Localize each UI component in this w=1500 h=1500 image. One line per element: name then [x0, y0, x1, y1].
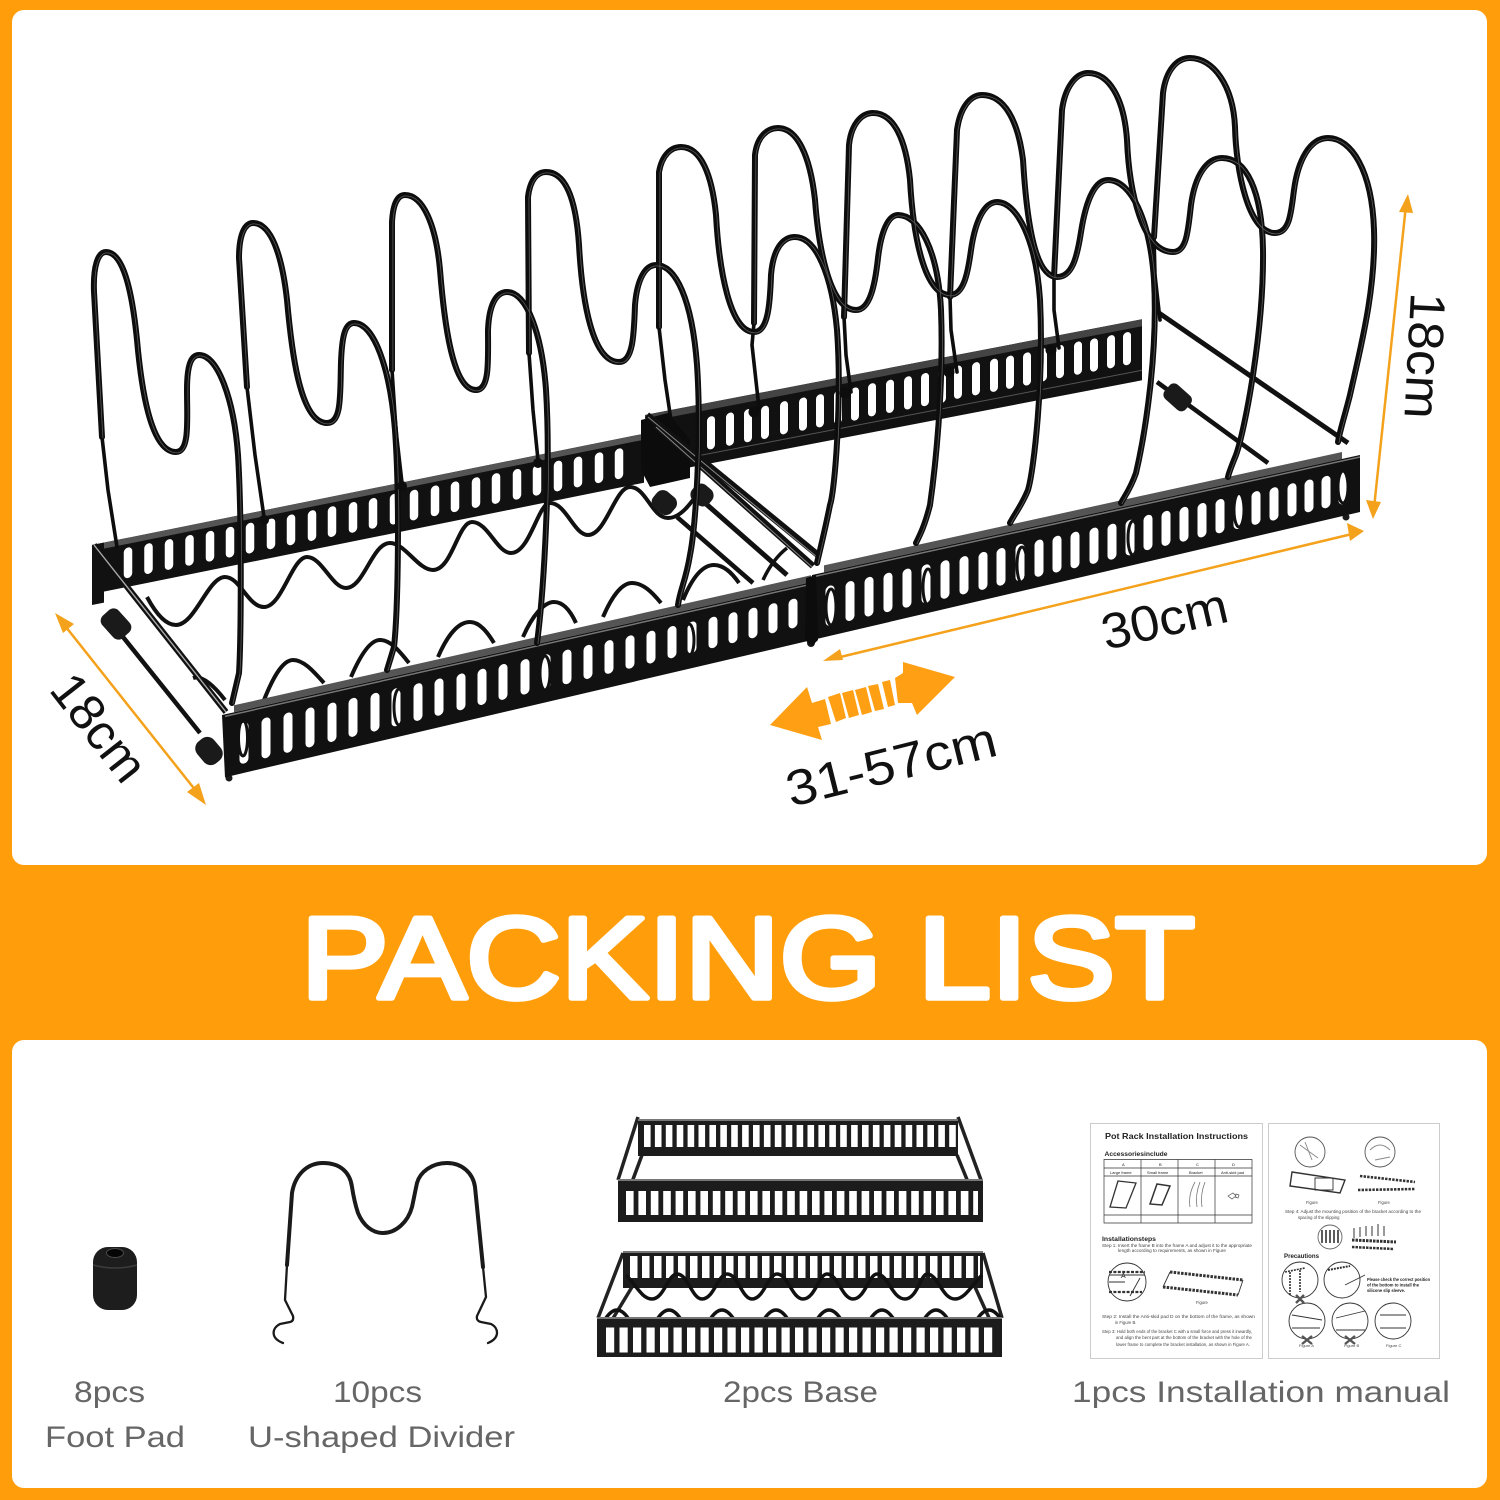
manual precaution note: silicone slip sleeve. — [1367, 1288, 1405, 1293]
manual accessories table: Small frame — [1147, 1170, 1169, 1175]
manual figures top — [1290, 1137, 1415, 1193]
dimension arrow: depth left — [55, 613, 206, 805]
manual step text — [1102, 1243, 1256, 1347]
label: foot pad name: Foot Pad — [45, 1421, 185, 1454]
icon: u-shaped divider — [274, 1163, 497, 1343]
wire rings through slots — [238, 471, 1348, 756]
manual accessories table: D — [1232, 1162, 1235, 1167]
manual figure labels: Figure B — [1344, 1343, 1359, 1348]
manual: page one: A — [1121, 1273, 1126, 1280]
base frame: lower — [597, 1251, 1002, 1357]
label: divider count: 10pcs — [333, 1376, 422, 1409]
manual step text: in Figure B. — [1115, 1320, 1136, 1325]
foot pads — [98, 381, 1349, 782]
panel: packing list contents — [12, 1040, 1487, 1488]
label: installation manual: 1pcs Installation manual — [1072, 1376, 1450, 1409]
wave wire: front humps — [193, 548, 787, 700]
manual accessories table — [1104, 1160, 1252, 1223]
manual title: Pot Rack Installation Instructions — [1105, 1132, 1249, 1141]
manual precautions figures — [1282, 1262, 1411, 1344]
manual steps heading: Installationsteps — [1102, 1236, 1156, 1243]
heading: packing list: PACKING LIST — [301, 893, 1195, 1023]
manual precautions heading: Precautions — [1284, 1254, 1320, 1260]
manual figure labels: Figure C — [1386, 1343, 1401, 1348]
side rods: right — [1157, 313, 1348, 463]
manual step four text: spacing of the slipping — [1298, 1215, 1340, 1220]
manual step text: length according to requirements, as shown in Figure — [1118, 1248, 1227, 1253]
base frame: upper — [618, 1117, 983, 1222]
manual accessories table: Bracket — [1189, 1170, 1203, 1175]
manual step text: lower frame to complete the bracket installation, as shown in Figure A. — [1116, 1342, 1250, 1347]
manual accessories table: B — [1159, 1162, 1162, 1167]
wire hooks — [259, 344, 1056, 525]
manual step text: and align the bent part at the bottom of the bracket with the hole of the — [1116, 1335, 1253, 1340]
manual step four text: Step 4: Adjust the mounting position of the bracket according to the — [1285, 1209, 1422, 1214]
manual step text: Step 3: Hold both ends of the bracket C with a small force and press it inwardly, — [1102, 1329, 1252, 1334]
manual figure labels: Figure A — [1299, 1343, 1314, 1348]
label: 18cm depth: 18cm — [39, 662, 159, 793]
centre bracket — [641, 413, 690, 487]
manual step four text: Figure — [1306, 1200, 1319, 1205]
dimension arrow: height — [1366, 194, 1413, 519]
panel: product dimensions — [12, 10, 1487, 865]
front rail: left frame — [222, 575, 811, 778]
manual step text: Step 2: Install the Anti-skid pad D on the bottom of the frame, as shown — [1102, 1314, 1256, 1319]
centre joint — [805, 575, 818, 646]
label: 18cm height: 18cm — [1393, 291, 1456, 420]
manual accessories table: Large frame — [1110, 1170, 1132, 1175]
side rods: centre — [647, 415, 818, 583]
icon: foot pad — [93, 1247, 137, 1310]
manual step four text — [1285, 1200, 1422, 1220]
label: 30cm length: 30cm — [1096, 577, 1233, 661]
expansion arrow — [770, 662, 955, 740]
manual accessories table: A — [1122, 1162, 1125, 1167]
label: 31-57cm range: 31-57cm — [780, 711, 1002, 818]
manual figures middle — [1318, 1224, 1396, 1249]
manual precaution note — [1367, 1277, 1430, 1293]
manual: page one — [1090, 1124, 1262, 1358]
label: divider name: U-shaped Divider — [248, 1421, 515, 1454]
rack wire dividers — [94, 58, 1374, 703]
manual step figure — [1108, 1263, 1243, 1301]
manual accessories table: C — [1196, 1162, 1199, 1167]
manual accessories heading: Accessoriesinclude — [1104, 1151, 1168, 1158]
label: foot pad: 8pcs — [74, 1376, 145, 1409]
back rail: left frame — [92, 434, 644, 605]
manual accessories table: Anti-skid pad — [1221, 1170, 1244, 1175]
side rods: left — [94, 545, 226, 733]
manual figure labels — [1299, 1343, 1401, 1348]
manual step text: Figure — [1196, 1300, 1209, 1305]
manual step four text: Figure — [1378, 1200, 1391, 1205]
wave wire: rear — [147, 487, 700, 625]
wire highlights — [95, 59, 1375, 704]
manual step text: Step 1: Insert the frame B into the frame A and adjust it to the appropriate — [1102, 1243, 1253, 1248]
back rail: right frame — [645, 319, 1142, 476]
manual precaution note: Please check the correct position — [1367, 1277, 1430, 1282]
dimension arrow: length — [823, 523, 1364, 661]
label: base: 2pcs Base — [723, 1376, 878, 1409]
front rail: right frame — [812, 448, 1360, 640]
manual precaution note: of the bottom to install the — [1367, 1282, 1420, 1288]
manual: page two — [1268, 1124, 1440, 1358]
